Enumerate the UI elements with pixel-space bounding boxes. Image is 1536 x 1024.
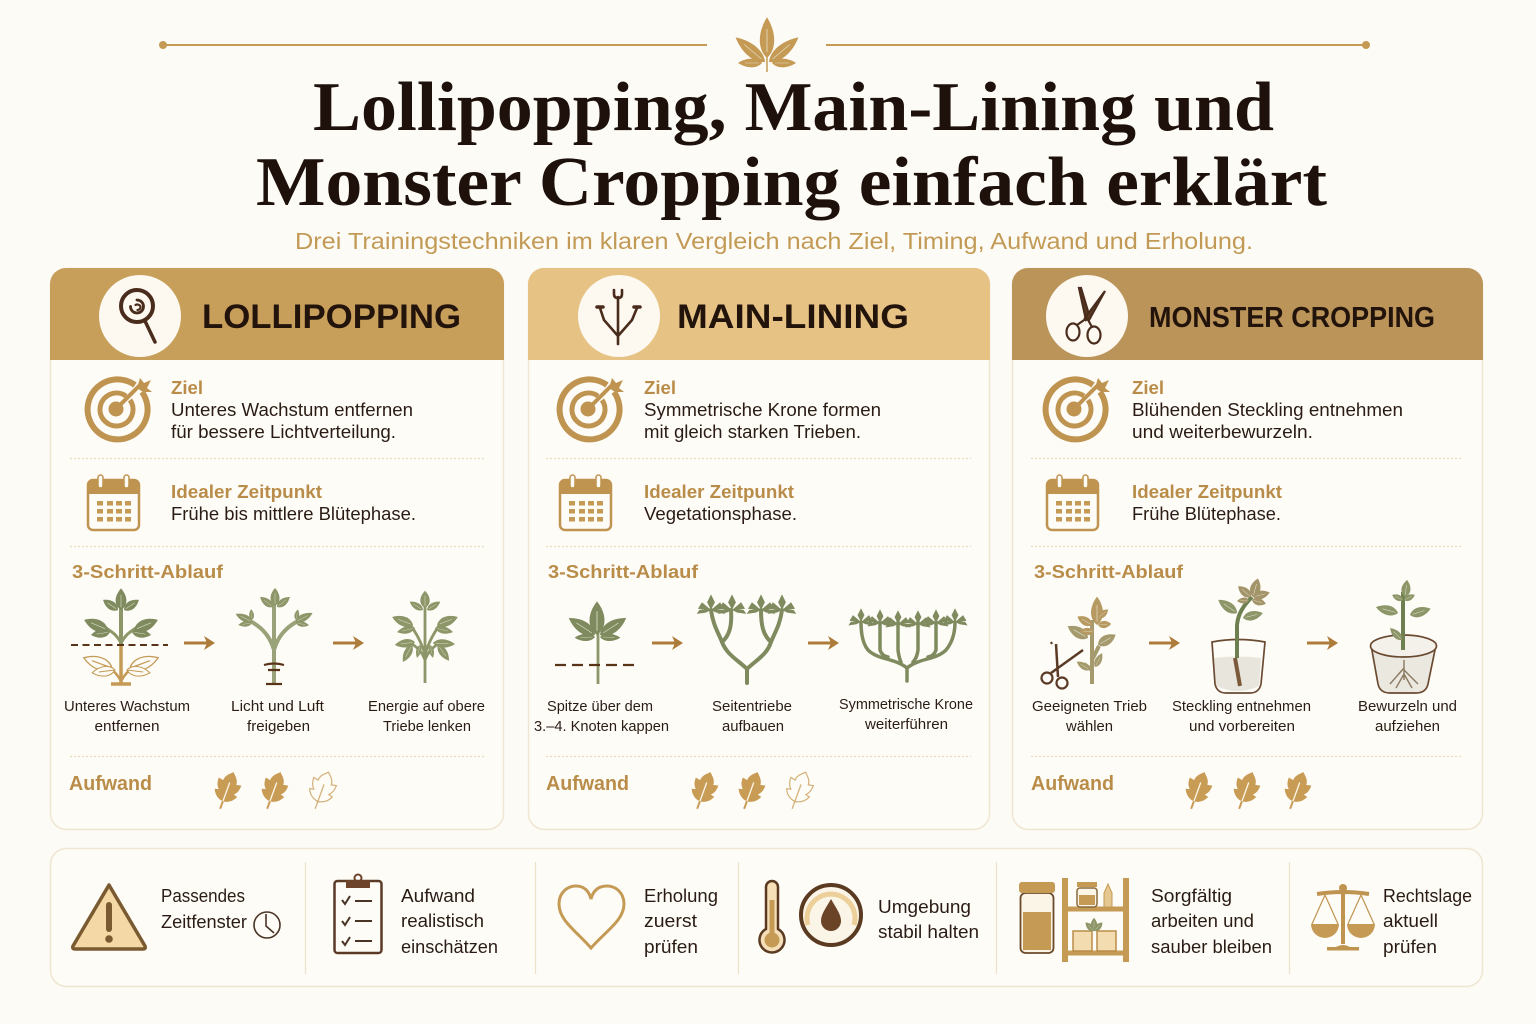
step 3 label: weiterführen (864, 716, 948, 733)
tip: checklist: einschätzen (401, 936, 498, 957)
timing row (560, 475, 797, 530)
step 2 label (1172, 698, 1311, 735)
tip: climate (760, 881, 979, 952)
title: Monster Cropping einfach erklärt (256, 144, 1327, 221)
tip: time window (73, 885, 280, 949)
steps heading: 3-Schritt-Ablauf (72, 562, 224, 582)
arrow (1307, 636, 1338, 650)
step 3 label: aufziehen (1375, 718, 1440, 735)
step 1 label (1032, 698, 1147, 735)
panel: Monster Cropping (1012, 268, 1483, 830)
subtitle: Drei Trainingstechniken im klaren Vergleich nach Ziel, Timing, Aufwand und Erholung. (295, 228, 1253, 254)
step 2 cutting in glass (1212, 577, 1271, 693)
arrow (333, 636, 364, 650)
goal row: Unteres Wachstum entfernen (171, 400, 413, 420)
tip: time window: Passendes (161, 885, 245, 906)
step 2 plant (697, 594, 796, 683)
header: Lollipopping: LOLLIPOPPING (202, 298, 461, 336)
step 1 plant (555, 601, 640, 684)
effort rating (69, 768, 340, 813)
effort rating: Aufwand (1031, 773, 1114, 795)
step 2 label: Licht und Luft (231, 698, 325, 715)
timing row (1047, 475, 1282, 530)
timing row: Idealer Zeitpunkt (171, 482, 322, 502)
step 3 label (839, 696, 973, 733)
step 1 plant (71, 588, 168, 684)
timing row (88, 475, 416, 530)
tip: time window: Zeitfenster (161, 911, 247, 932)
goal row: und weiterbewurzeln. (1132, 422, 1313, 442)
goal row (88, 378, 413, 442)
arrow (184, 636, 215, 650)
step 1 label: entfernen (94, 718, 160, 735)
arrow (1149, 636, 1180, 650)
goal row (1046, 378, 1403, 442)
tip: checklist (334, 874, 498, 957)
timing row: Vegetationsphase. (644, 504, 797, 524)
header: Monster Cropping (1012, 268, 1483, 360)
top ornament (159, 17, 1370, 72)
timing row: Frühe Blütephase. (1132, 504, 1281, 524)
header: Main-Lining (528, 268, 990, 360)
steps heading: 3-Schritt-Ablauf (1034, 562, 1184, 582)
tip: legal scales: Rechtslage (1383, 885, 1472, 906)
panel: Lollipopping (50, 268, 504, 830)
timing row: Frühe bis mittlere Blütephase. (171, 504, 416, 524)
step 3 plant (390, 591, 460, 683)
tip: legal scales: prüfen (1383, 936, 1437, 957)
goal row: mit gleich starken Trieben. (644, 422, 861, 442)
goal row: Ziel (644, 378, 676, 398)
tip: checklist: realistisch (401, 910, 484, 931)
step 3 label: Triebe lenken (383, 718, 471, 735)
timing row: Idealer Zeitpunkt (644, 482, 794, 502)
arrow (808, 636, 839, 650)
tip: heart: zuerst (644, 910, 697, 931)
step 2 label (712, 698, 792, 735)
arrow (652, 636, 683, 650)
step 1 label: Geeigneten Trieb (1032, 698, 1147, 715)
tip: heart (559, 885, 718, 957)
step 3 label: Symmetrische Krone (839, 696, 973, 713)
panel: Main-Lining (528, 268, 990, 830)
step 2 label (231, 698, 325, 735)
header: Monster Cropping: MONSTER CROPPING (1149, 302, 1435, 334)
step 2 label: Steckling entnehmen (1172, 698, 1311, 715)
tip: heart: Erholung (644, 885, 718, 906)
tip: clean storage: sauber bleiben (1151, 936, 1272, 957)
tip: checklist: Aufwand (401, 885, 475, 906)
goal row: Blühenden Steckling entnehmen (1132, 400, 1403, 420)
step 2 label: freigeben (247, 718, 310, 735)
step 2 plant (234, 588, 314, 684)
goal row: Symmetrische Krone formen (644, 400, 881, 420)
step 1 label (64, 698, 190, 735)
step 3 label (368, 698, 485, 735)
step 3 rooted plant in pot (1370, 579, 1436, 693)
step 1 label: Unteres Wachstum (64, 698, 190, 715)
title: Lollipopping, Main-Lining und (313, 69, 1274, 146)
step 2 label: und vorbereiten (1189, 718, 1295, 735)
goal row (560, 378, 881, 442)
step 1 label: wählen (1065, 718, 1113, 735)
effort rating (546, 768, 817, 813)
tip: heart: prüfen (644, 936, 698, 957)
step 3 plant (848, 608, 968, 681)
step 3 label: Bewurzeln und (1358, 698, 1457, 715)
effort rating: Aufwand (546, 773, 629, 795)
tip: legal scales: aktuell (1383, 910, 1438, 931)
step 3 label: Energie auf obere (368, 698, 485, 715)
tip: climate: stabil halten (878, 921, 979, 942)
title (256, 69, 1327, 221)
goal row: Ziel (1132, 378, 1164, 398)
effort rating: Aufwand (69, 773, 152, 795)
effort rating (1031, 768, 1315, 813)
step 1 label: Spitze über dem (547, 698, 653, 715)
step 1 plant with scissors (1042, 597, 1118, 688)
header: Main-Lining: MAIN-LINING (677, 298, 909, 336)
tip: clean storage (1019, 878, 1272, 962)
steps heading: 3-Schritt-Ablauf (548, 562, 699, 582)
step 3 label (1358, 698, 1457, 735)
tip: clean storage: arbeiten und (1151, 910, 1254, 931)
goal row: Ziel (171, 378, 203, 398)
step 2 label: aufbauen (722, 718, 784, 735)
tip: legal scales (1311, 884, 1472, 957)
panel: tips strip (50, 848, 1482, 986)
step 1 label: 3.–4. Knoten kappen (534, 718, 669, 735)
step 1 label (534, 698, 669, 735)
timing row: Idealer Zeitpunkt (1132, 482, 1282, 502)
tip: climate: Umgebung (878, 896, 971, 917)
goal row: für bessere Lichtverteilung. (171, 422, 396, 442)
step 2 label: Seitentriebe (712, 698, 792, 715)
tip: clean storage: Sorgfältig (1151, 885, 1232, 906)
header: Lollipopping (50, 268, 504, 360)
